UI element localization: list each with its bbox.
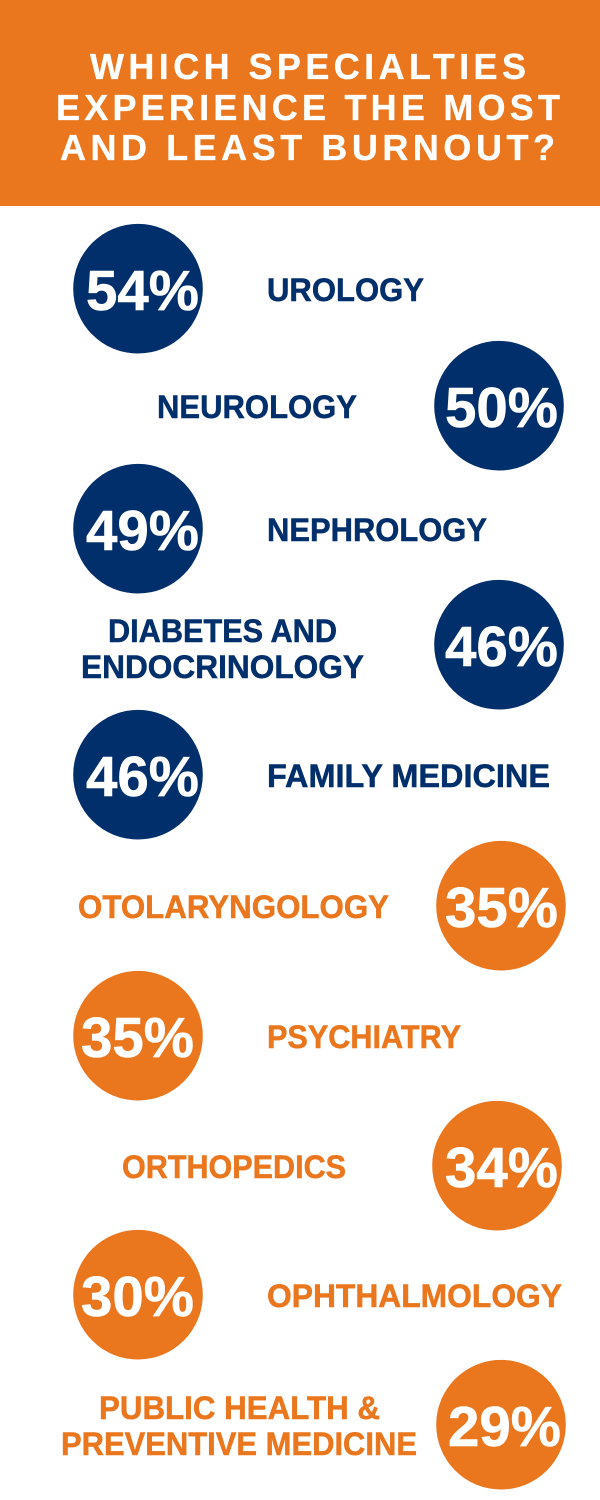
row: otolaryngology 35%: OTOLARYNGOLOGY	[78, 889, 389, 925]
row: family medicine 46%: FAMILY MEDICINE	[267, 758, 550, 794]
row: neurology 50%	[157, 341, 564, 471]
header banner	[0, 0, 600, 206]
row: public health and preventive medicine 29%: PREVENTIVE MEDICINE	[61, 1426, 417, 1462]
row: neurology 50%: 50%	[445, 376, 558, 440]
row: ophthalmology 30%: OPHTHALMOLOGY	[267, 1278, 562, 1314]
row: public health and preventive medicine 29%: PUBLIC HEALTH &	[99, 1390, 380, 1426]
row: diabetes and endocrinology 46%: DIABETES AND	[108, 613, 337, 649]
row: nephrology 49%: NEPHROLOGY	[267, 512, 487, 548]
row: public health and preventive medicine 29%: 29%	[448, 1395, 561, 1459]
title	[56, 46, 560, 168]
title: WHICH SPECIALTIES	[90, 46, 526, 87]
row: ophthalmology 30%: 30%	[81, 1265, 194, 1329]
row: public health and preventive medicine 29%	[61, 1360, 566, 1489]
row: nephrology 49%	[73, 464, 487, 594]
row: otolaryngology 35%: 35%	[445, 876, 558, 940]
row: urology 54%	[73, 224, 424, 354]
row: urology 54%: 54%	[86, 259, 199, 323]
row: orthopedics 34%: 34%	[445, 1136, 558, 1200]
row: urology 54%: UROLOGY	[267, 272, 424, 308]
row: orthopedics 34%	[122, 1101, 562, 1230]
row: psychiatry 35%	[73, 971, 461, 1100]
row: family medicine 46%	[73, 710, 550, 840]
row: psychiatry 35%: PSYCHIATRY	[267, 1019, 461, 1055]
row: nephrology 49%: 49%	[86, 499, 199, 563]
row: diabetes and endocrinology 46%: 46%	[445, 615, 558, 679]
row: neurology 50%: NEUROLOGY	[157, 389, 357, 425]
row: family medicine 46%: 46%	[86, 745, 199, 809]
row: ophthalmology 30%	[73, 1230, 562, 1359]
row: otolaryngology 35%	[78, 841, 566, 970]
row: diabetes and endocrinology 46%: ENDOCRINOLOGY	[81, 649, 364, 685]
row: psychiatry 35%: 35%	[81, 1006, 194, 1070]
title: AND LEAST BURNOUT?	[60, 127, 555, 168]
row: diabetes and endocrinology 46%	[81, 580, 564, 710]
row: orthopedics 34%: ORTHOPEDICS	[122, 1149, 346, 1185]
title: EXPERIENCE THE MOST	[56, 87, 560, 128]
